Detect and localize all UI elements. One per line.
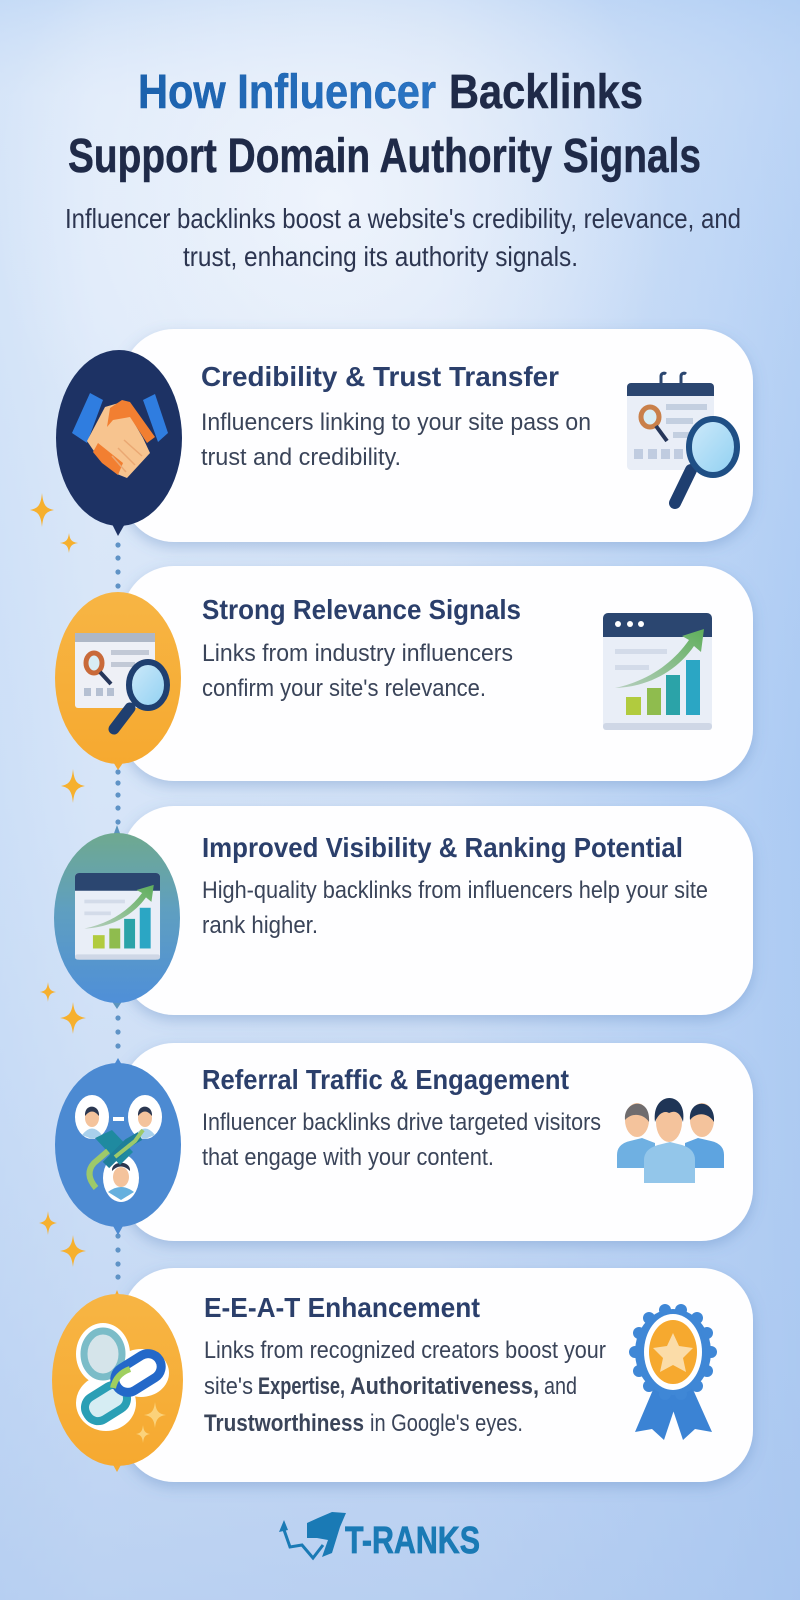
text: e-e-a-t: Links from recognized creators boost your (204, 1337, 606, 1364)
text: credibility (201, 409, 591, 471)
panel: credibility and trust transfer (122, 329, 753, 542)
text: credibility: trust and credibility. (201, 444, 401, 471)
text: credibility: Influencers linking to your site pass on (201, 409, 591, 436)
badge: chain link (52, 1290, 183, 1472)
icon: calendar and magnifier (627, 373, 737, 503)
heading: relevance: Strong Relevance Signals (202, 594, 521, 625)
badge: search magnifier (55, 592, 181, 770)
icon: browser growth chart (603, 613, 712, 730)
heading: credibility: Credibility & Trust Transfer (201, 361, 559, 392)
text: relevance: confirm your site's relevance. (202, 675, 486, 702)
icon: award ribbon (629, 1304, 717, 1440)
icon: chain links (76, 1323, 169, 1443)
text: e-e-a-t: site's (204, 1373, 253, 1400)
heading: visibility: Improved Visibility & Ranking Potential (202, 832, 683, 863)
badge: connected influencers (55, 1058, 181, 1235)
heading: e-e-a-t: E-E-A-T Enhancement (204, 1292, 480, 1323)
text: e-e-a-t: in Google's eyes. (370, 1410, 523, 1437)
text: e-e-a-t (204, 1337, 606, 1437)
logo: T-RANKS (279, 1512, 480, 1562)
text: visibility (202, 877, 708, 939)
sparkles (30, 493, 86, 1267)
icon: search panel and magnifier (75, 633, 167, 729)
icon: avatars and chain (75, 1095, 162, 1202)
icon: logo mark (279, 1512, 346, 1558)
subtitle (65, 203, 741, 272)
text: relevance (202, 640, 513, 702)
panel: improved visibility and ranking potential (122, 806, 753, 1015)
heading: referral: Referral Traffic & Engagement (202, 1064, 569, 1095)
badge: growth chart (54, 825, 180, 1009)
icon: growth chart (75, 873, 160, 960)
text: referral: Influencer backlinks drive targeted visitors (202, 1109, 601, 1136)
title: Backlinks (449, 66, 643, 119)
panel: e-e-a-t enhancement (122, 1268, 753, 1482)
icon: handshake (72, 393, 168, 478)
panel: referral traffic and engagement (122, 1043, 753, 1241)
title (68, 66, 701, 183)
text: e-e-a-t: and (544, 1373, 577, 1400)
text: relevance: Links from industry influencers (202, 640, 513, 667)
connector dots (115, 542, 121, 1280)
text: referral (202, 1109, 601, 1171)
text: e-e-a-t: Expertise, (258, 1373, 345, 1400)
text: e-e-a-t: Trustworthiness (204, 1410, 364, 1437)
text: T-RANKS: T-RANKS (345, 1520, 480, 1562)
icon: three people (617, 1098, 724, 1183)
badge: handshake (56, 350, 182, 536)
text: visibility: rank higher. (202, 912, 318, 939)
text: referral: that engage with your content. (202, 1144, 494, 1171)
subtitle: trust, enhancing its authority signals. (183, 241, 578, 272)
panel: strong relevance signals (122, 566, 753, 781)
title: How Influencer (138, 66, 436, 119)
text: e-e-a-t: Authoritativeness, (350, 1373, 539, 1400)
text: visibility: High-quality backlinks from influencers help your site (202, 877, 708, 904)
